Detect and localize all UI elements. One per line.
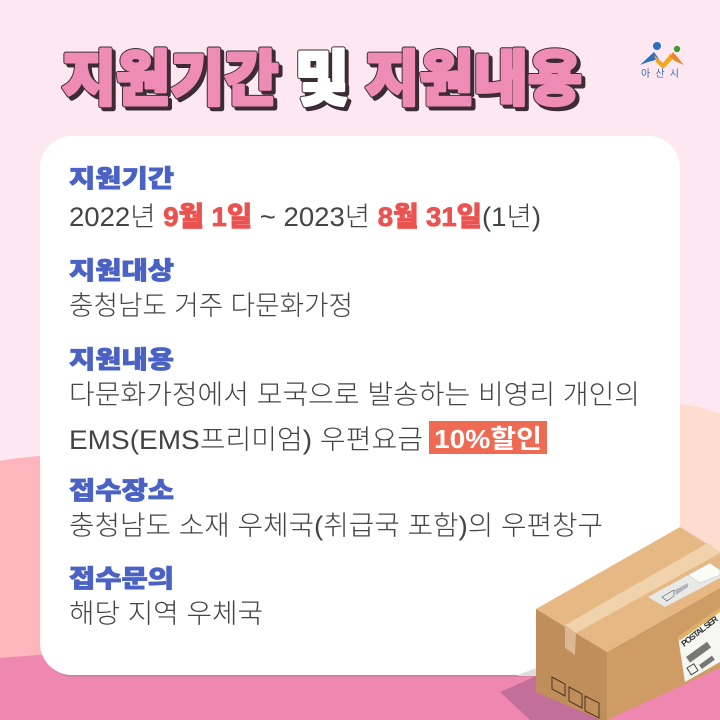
icon: cardboard parcel: POSTAL SER xyxy=(679,614,720,649)
section: eligibility xyxy=(69,257,353,321)
panel: main content card xyxy=(40,136,680,677)
section: eligibility: 지원대상 xyxy=(69,257,174,285)
section: inquiries: 접수문의 xyxy=(69,565,174,593)
logo: Asan city xyxy=(640,42,684,80)
title: 지원기간 및 지원내용 xyxy=(62,46,582,113)
handling marks xyxy=(552,677,599,718)
section: eligibility: 충청남도 거주 다문화가정 xyxy=(69,291,353,321)
tape label xyxy=(648,563,720,607)
section: support details xyxy=(69,346,640,455)
section: support details: 다문화가정에서 모국으로 발송하는 비영리 개인의 xyxy=(69,380,640,410)
title: 지원기간 및 지원내용 xyxy=(62,46,582,113)
section: inquiries xyxy=(69,565,263,629)
section: support period: 2022년 9월 1일 ~ 2023년 8월 31일(1년) xyxy=(69,202,541,232)
section: support details: 지원내용 xyxy=(69,346,174,374)
highlight: 10% discount: 10%할인 xyxy=(434,424,542,454)
section: where to apply: 접수장소 xyxy=(69,477,174,505)
section: support details: EMS(EMS프리미엄) 우편요금 xyxy=(69,425,423,455)
section: where to apply: 충청남도 소재 우체국(취급국 포함)의 우편창구 xyxy=(69,511,603,541)
tape xyxy=(565,543,720,633)
icon: cardboard parcel xyxy=(500,527,720,720)
shipping label xyxy=(678,608,720,682)
section: support period: 지원기간 xyxy=(69,165,174,193)
section: support period xyxy=(69,165,541,232)
section: where to apply xyxy=(69,477,603,541)
title: 지원기간 및 지원내용 xyxy=(65,49,585,116)
logo: Asan city: 아 산 시 xyxy=(641,68,679,80)
section: inquiries: 해당 지역 우체국 xyxy=(69,599,263,629)
